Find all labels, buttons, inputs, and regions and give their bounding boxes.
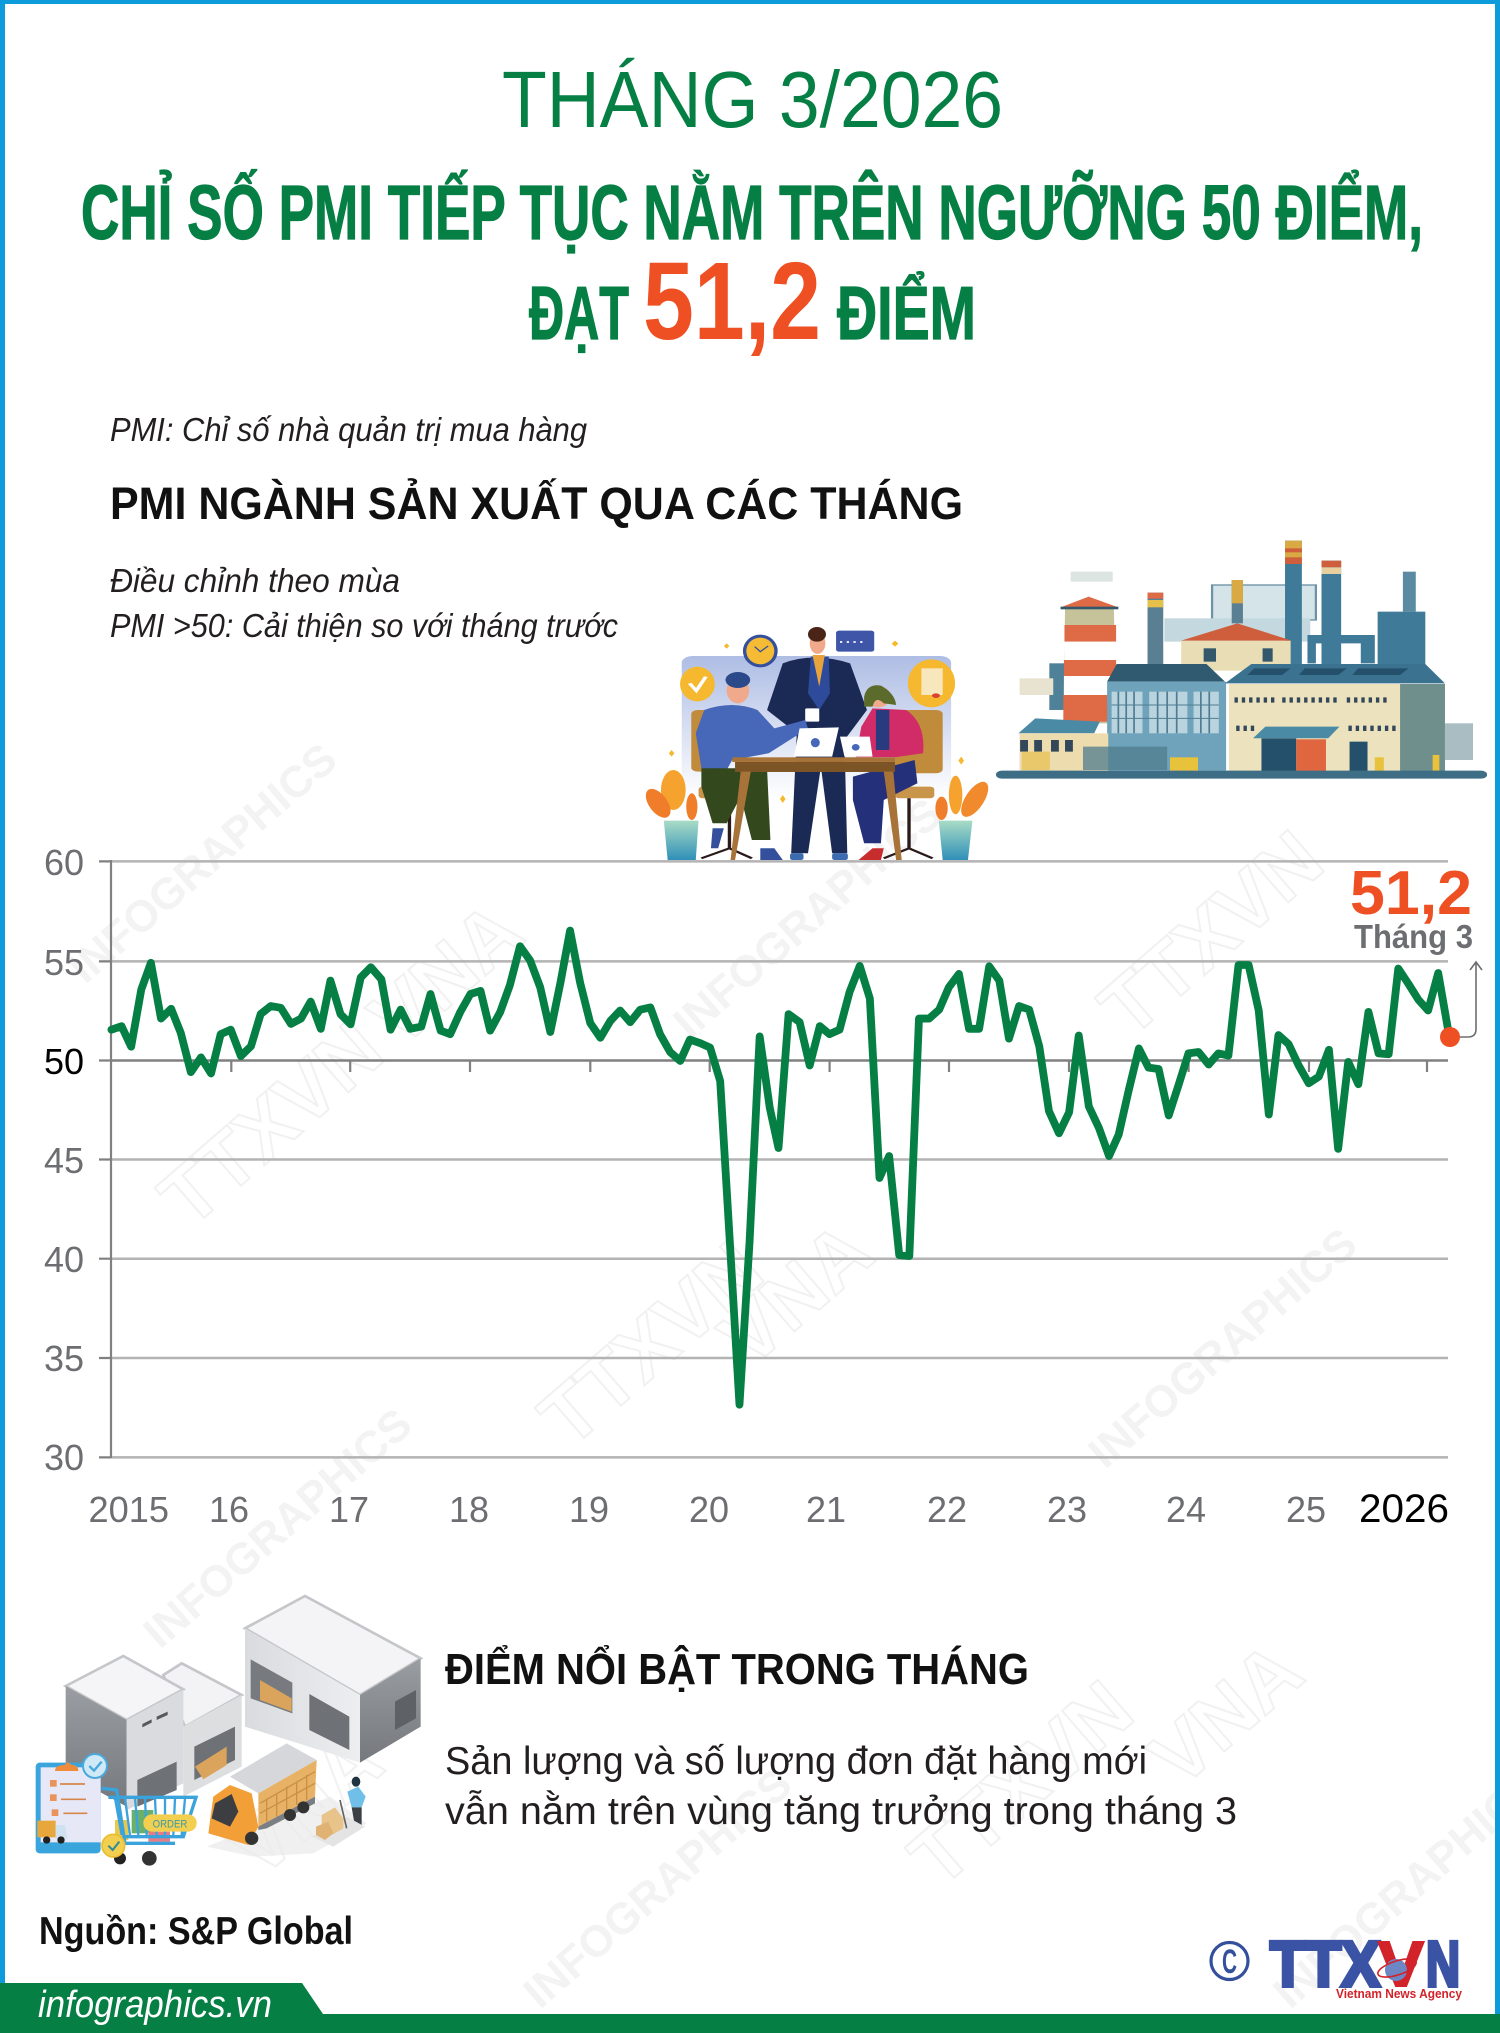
text: INFOGRAPHICS [59,734,346,993]
TTXVN logo: V [1378,1928,1424,2000]
latest point marker [1440,1027,1460,1047]
x axis labels: 20 [689,1489,729,1530]
title: headline line 2 [529,240,976,363]
text: VNA [1133,1625,1319,1803]
text: INFOGRAPHICS [134,1399,421,1658]
x axis labels: 21 [806,1489,846,1530]
x axis labels: 19 [569,1489,609,1530]
text: INFOGRAPHICS [514,1759,801,2018]
TTXVN logo: N [1426,1928,1460,2000]
x axis labels: 2015 [88,1489,169,1530]
callout arrow [1460,962,1482,1037]
callout value: 51,2 [1350,859,1472,928]
x axis labels: 16 [209,1489,249,1530]
TTXVN logo [1270,1928,1463,2001]
illustration: warehouse and logistics [36,1596,421,1866]
y axis labels: 55 [44,942,84,983]
illustration: warehouse and logistics: ORDER [153,1818,187,1830]
chart heading: PMI NGÀNH SẢN XUẤT QUA CÁC THÁNG [110,478,963,529]
text: TTXVN [523,1224,779,1463]
highlights text: Sản lượng và số lượng đơn đặt hàng mới [445,1740,1147,1783]
section heading: highlights: ĐIỂM NỔI BẬT TRONG THÁNG [445,1643,1029,1694]
TTXVN logo: TTX [1270,1928,1380,2000]
source: Nguồn: S&P Global [39,1910,353,1953]
copyright symbol: C [1222,1943,1237,1981]
text: TTXVN [893,1664,1149,1903]
y axis labels [44,842,84,1478]
line chart [44,842,1482,1531]
x axis labels: 24 [1166,1489,1206,1530]
PMI data line [111,931,1449,1405]
x axis labels: 2026 [1359,1487,1449,1531]
footer bar [0,1983,1500,2033]
title: month: THÁNG 3/2026 [502,55,1003,144]
x axis labels: 18 [449,1489,489,1530]
PMI definition: PMI: Chỉ số nhà quản trị mua hàng [110,411,588,448]
x axis labels: 25 [1286,1489,1326,1530]
text: INFOGRAPHICS [664,789,951,1048]
x axis labels [88,1487,1449,1531]
text: VNA [703,1205,889,1383]
title: headline line 2: ĐIỂM [837,271,976,355]
x axis labels: 22 [927,1489,967,1530]
chart notes: Điều chỉnh theo mùa [110,562,400,599]
text: VNA [213,1715,399,1893]
y axis labels: 30 [44,1437,84,1478]
y axis labels: 60 [44,842,84,883]
y axis labels: 35 [44,1338,84,1379]
copyright symbol [1211,1942,1248,1981]
illustration: factory [996,541,1487,779]
x axis labels: 23 [1047,1489,1087,1530]
title: headline line 2: 51,2 [643,240,821,363]
TTXVN logo: Vietnam News Agency [1336,1986,1463,2001]
text: TTXVN [143,1004,399,1243]
text: INFOGRAPHICS [1079,1219,1366,1478]
x axis labels: 17 [329,1489,369,1530]
title: headline line 2: ĐẠT [529,271,629,355]
highlights text: vẫn nằm trên vùng tăng trưởng trong tháng 3 [445,1790,1237,1833]
website label: infographics.vn [38,1984,272,2026]
y axis labels: 40 [44,1239,84,1280]
chart notes [110,562,618,644]
highlights text [445,1740,1237,1833]
text: TTXVN [1083,814,1339,1053]
illustration: business meeting [641,627,994,860]
text: VNA [353,885,539,1063]
y axis labels: 50 [44,1041,84,1082]
callout month: Tháng 3 [1354,918,1473,955]
y axis labels: 45 [44,1140,84,1181]
chart notes: PMI >50: Cải thiện so với tháng trước [110,607,618,644]
